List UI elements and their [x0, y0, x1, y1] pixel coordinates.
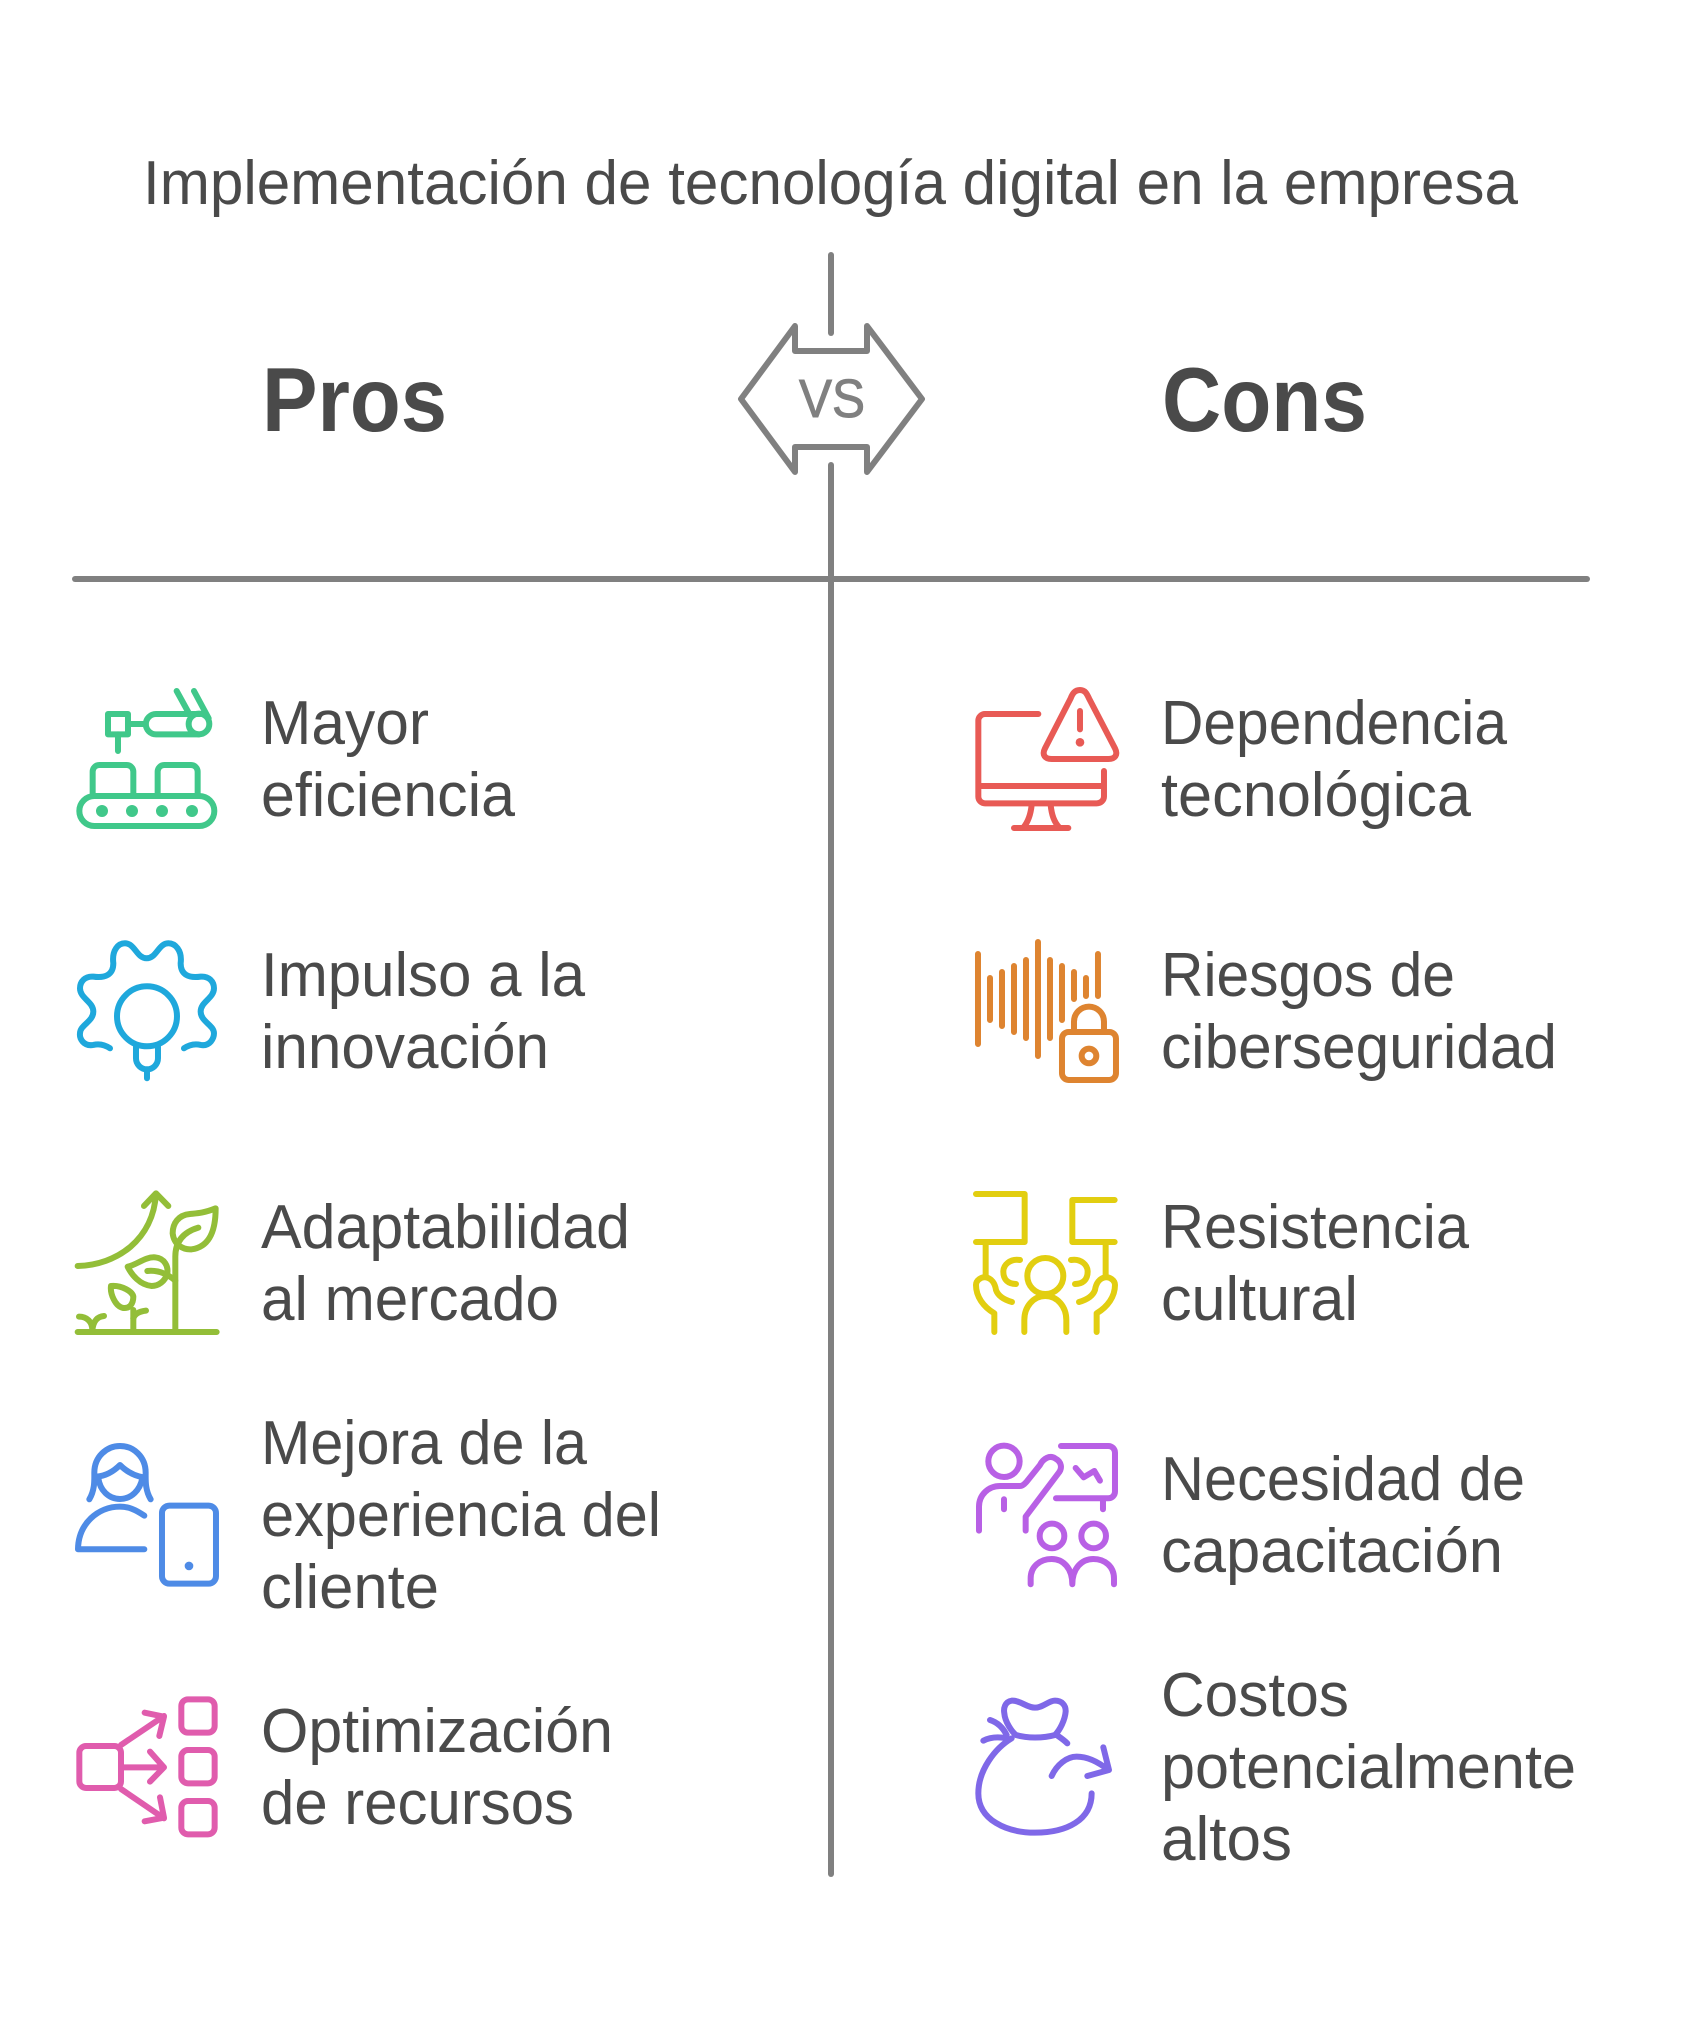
- label text: Necesidad de: [1161, 1445, 1525, 1514]
- con item: Costos potencialmente altos: [978, 1661, 1576, 1874]
- con item: Necesidad de capacitación: [979, 1445, 1525, 1586]
- label text: [261, 1193, 630, 1334]
- label text: [1161, 1193, 1469, 1334]
- vertical divider top: [828, 255, 834, 333]
- label text: de recursos: [261, 1769, 574, 1838]
- label text: [261, 941, 586, 1082]
- con item: Resistencia cultural: [976, 1193, 1469, 1334]
- label text: Riesgos de: [1161, 941, 1455, 1010]
- heading: Pros: Pros: [262, 350, 447, 451]
- icon: money bag with arrow: [978, 1701, 1109, 1833]
- vertical divider main: [828, 465, 834, 1874]
- con item: Dependencia tecnológica: [978, 689, 1507, 830]
- label text: potencialmente: [1161, 1733, 1576, 1802]
- label text: [261, 689, 516, 830]
- con item: Riesgos de ciberseguridad: [978, 941, 1557, 1082]
- icon: protester holding signs: [976, 1194, 1115, 1332]
- icon: monitor with warning triangle: [978, 690, 1116, 828]
- label text: [261, 1409, 661, 1622]
- icon: sound wave with padlock: [978, 942, 1116, 1080]
- pro item: Impulso a la innovación: [80, 941, 586, 1082]
- label text: capacitación: [1161, 1517, 1503, 1586]
- label text: ciberseguridad: [1161, 1013, 1557, 1082]
- label text: innovación: [261, 1013, 549, 1082]
- label text: altos: [1161, 1805, 1292, 1874]
- pro item: Optimización de recursos: [79, 1697, 613, 1838]
- icon: gear with lightbulb: [80, 943, 214, 1078]
- label text: [1161, 1661, 1576, 1874]
- VS badge: double-headed arrow: [741, 326, 922, 472]
- heading: Cons: Cons: [1162, 350, 1367, 451]
- pro item: Mayor eficiencia: [79, 689, 516, 830]
- label text: Adaptabilidad: [261, 1193, 630, 1262]
- icon: growing plants with rising arrow: [78, 1193, 217, 1332]
- label text: experiencia del: [261, 1481, 661, 1550]
- label text: [1161, 1445, 1525, 1586]
- label text: Mayor: [261, 689, 429, 758]
- label text: Costos: [1161, 1661, 1349, 1730]
- icon: trainer presenting to audience: [979, 1446, 1115, 1584]
- label text: [1161, 941, 1557, 1082]
- label text: Dependencia: [1161, 689, 1507, 758]
- icon: resource distribution arrows: [79, 1699, 215, 1834]
- label text: Resistencia: [1161, 1193, 1469, 1262]
- label text: tecnológica: [1161, 761, 1472, 830]
- label text: eficiencia: [261, 761, 516, 830]
- icon: customer with tablet: [78, 1446, 216, 1584]
- label text: Optimización: [261, 1697, 613, 1766]
- label text: Mejora de la: [261, 1409, 587, 1478]
- label text: cliente: [261, 1553, 439, 1622]
- horizontal divider: [75, 576, 1587, 582]
- label text: al mercado: [261, 1265, 559, 1334]
- label text: [1161, 689, 1507, 830]
- pro item: Mejora de la experiencia del cliente: [78, 1409, 661, 1622]
- label text: Impulso a la: [261, 941, 586, 1010]
- icon: robotic assembly line: [79, 691, 214, 826]
- label text: [261, 1697, 613, 1838]
- VS badge: double-headed arrow: VS: [799, 369, 865, 429]
- title: Implementación de tecnología digital en la empresa: [143, 149, 1518, 218]
- label text: cultural: [1161, 1265, 1358, 1334]
- pro item: Adaptabilidad al mercado: [78, 1193, 630, 1334]
